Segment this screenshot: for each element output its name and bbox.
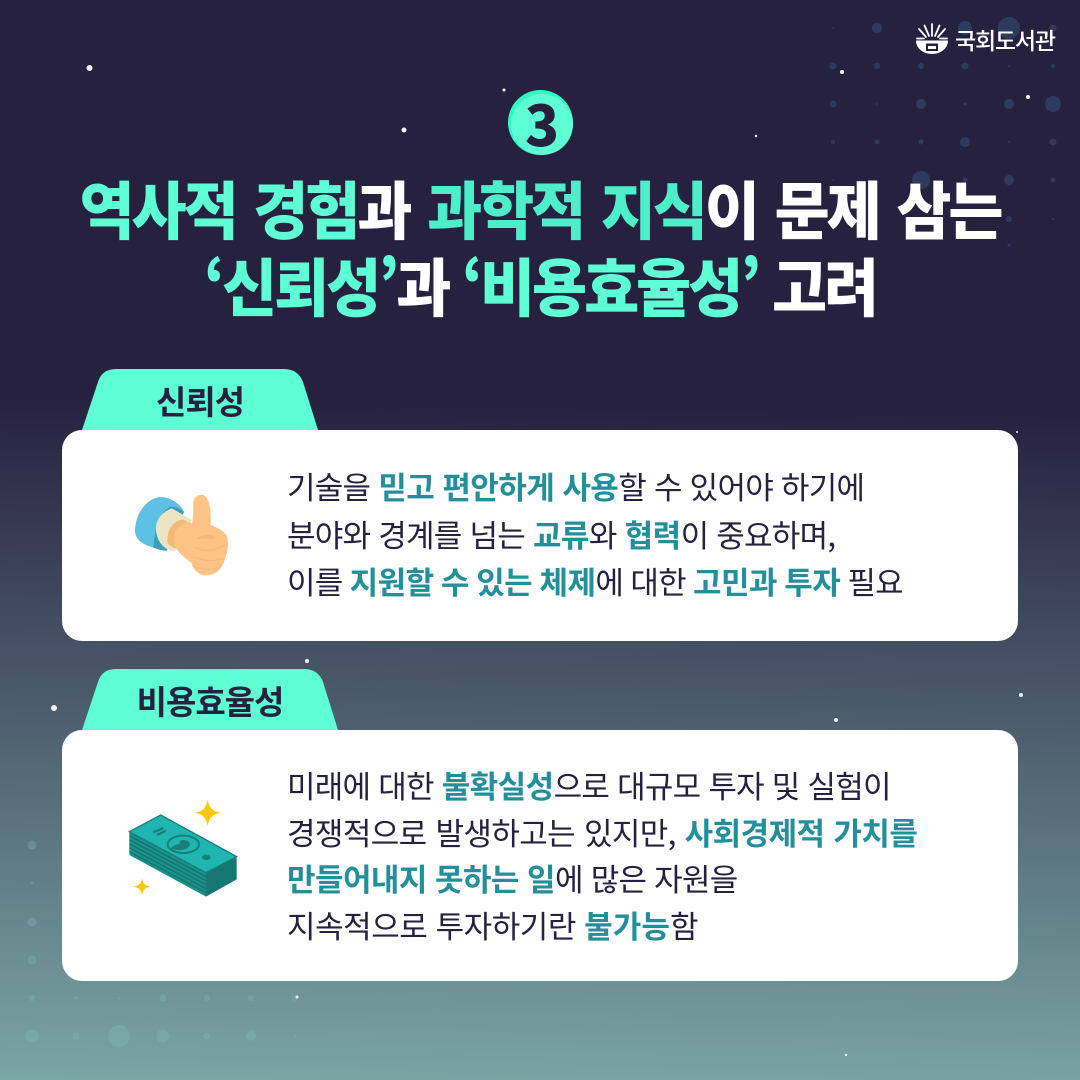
title [80, 162, 1002, 330]
icon: money stack [128, 800, 238, 897]
text line 2: 분야와 경계를 넘는 교류와 협력이 중요하며, [287, 511, 835, 556]
badge inner [511, 94, 573, 155]
text line 1: 기술을 믿고 편안하게 사용할 수 있어야 하기에 [287, 463, 864, 508]
text line 2: 경쟁적으로 발생하고는 있지만, 사회경제적 가치를 [287, 809, 917, 854]
title line 1: 역사적 경험과 과학적 지식이 문제 삼는 [80, 162, 1000, 253]
text block [287, 762, 917, 947]
icon: logo emblem [916, 23, 948, 54]
panel: 비용효율성 [62, 669, 1018, 981]
text block [287, 463, 903, 603]
text line 3: 만들어내지 못하는 일에 많은 자원을 [287, 855, 737, 900]
card [62, 430, 1018, 641]
text line 3: 이를 지원할 수 있는 체제에 대한 고민과 투자 필요 [287, 558, 903, 603]
panel: 신뢰성 [62, 369, 1018, 641]
text line 1: 미래에 대한 불확실성으로 대규모 투자 및 실험이 [287, 762, 891, 807]
title line 2: ‘신뢰성’과 ‘비용효율성’ 고려 [204, 239, 876, 330]
icon: thumbs up [135, 494, 228, 576]
tab label: 신뢰성 [156, 376, 244, 424]
badge inner: 3 [525, 82, 559, 163]
card [62, 730, 1018, 981]
logo: National Assembly Library [916, 22, 1056, 56]
tab shape [82, 369, 318, 430]
tab shape [82, 669, 338, 730]
text line 4: 지속적으로 투자하기란 불가능함 [287, 902, 698, 947]
tab label: 비용효율성 [137, 676, 283, 724]
logo text: 국회도서관 [955, 22, 1055, 56]
number badge [508, 90, 573, 155]
